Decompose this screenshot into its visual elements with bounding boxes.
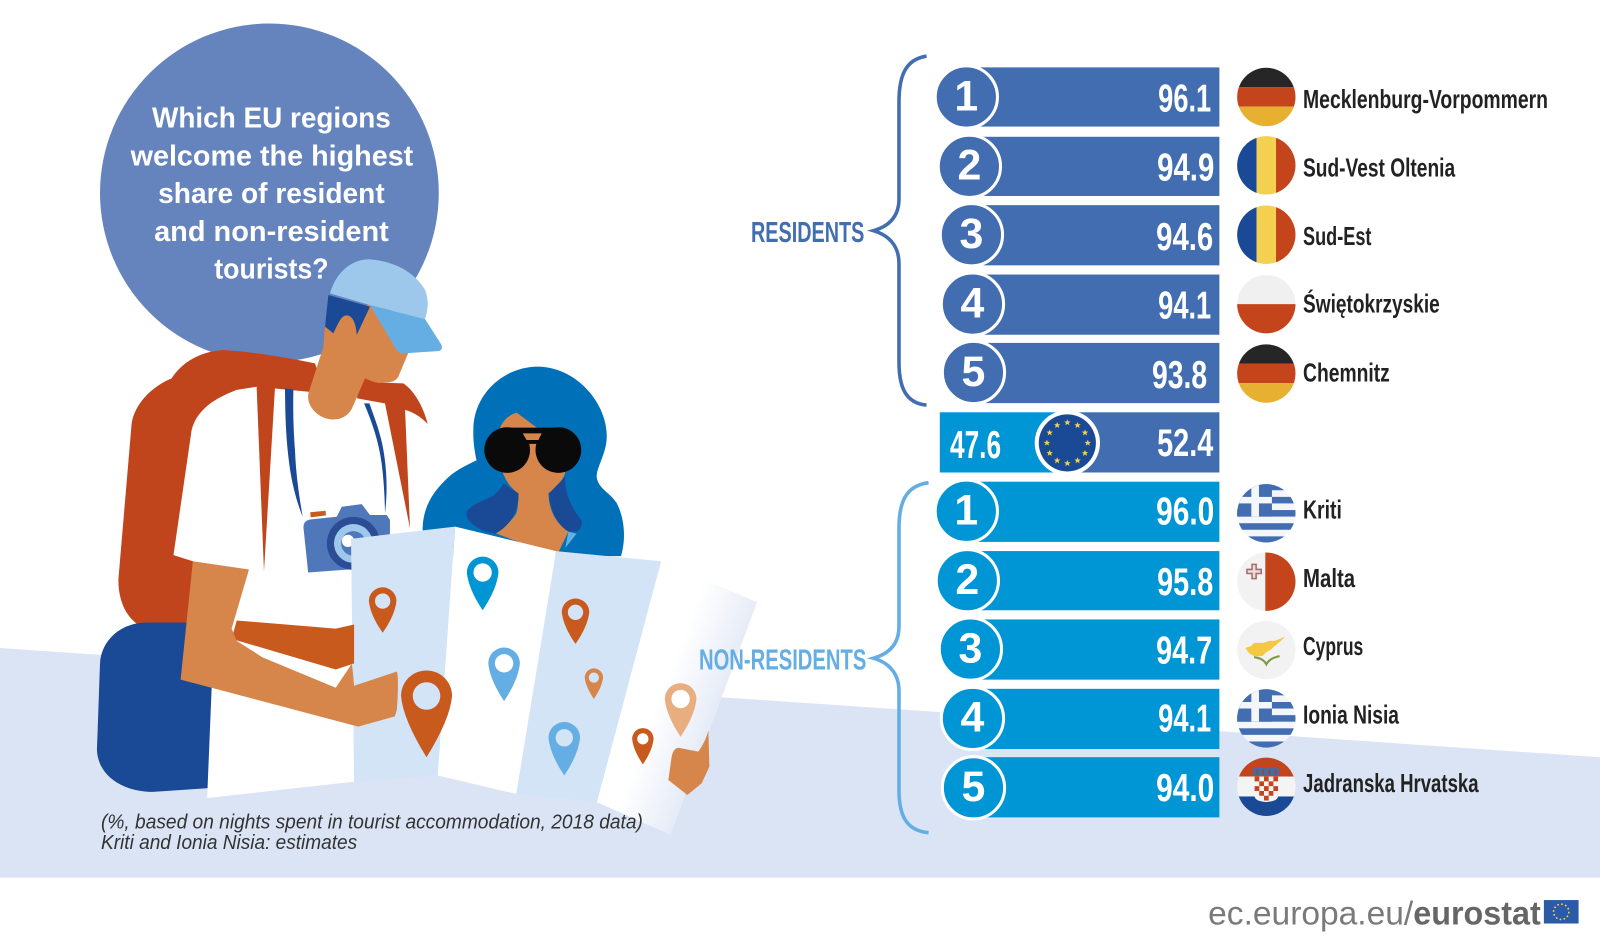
bar: rank 5 xyxy=(942,341,1219,404)
bar: rank 1: 96.0 xyxy=(1156,491,1214,534)
flag: Romania (Sud-Vest Oltenia) xyxy=(1237,136,1296,195)
bar: rank 2: 2 xyxy=(957,142,981,190)
bar: rank 5 xyxy=(942,757,1219,819)
illustration: tourists with map xyxy=(97,259,757,835)
region names: Ionia Nisia xyxy=(1303,702,1400,730)
region names: Jadranska Hrvatska xyxy=(1303,770,1479,798)
bar: rank 5: 94.0 xyxy=(1156,767,1214,810)
map pins xyxy=(369,557,696,776)
flag: Greece (Ionia Nisia) xyxy=(1237,689,1296,748)
background band xyxy=(0,648,1600,878)
icon: EU flag logo xyxy=(1544,900,1579,924)
footnote xyxy=(101,812,643,854)
bar: rank 1: 1 xyxy=(954,72,978,120)
footnote: Kriti and Ionia Nisia: estimates xyxy=(101,832,357,854)
far arm xyxy=(232,620,354,669)
non-residents bars xyxy=(935,480,1219,819)
bar: rank 4 xyxy=(941,273,1219,335)
non-residents brace and label xyxy=(699,483,929,833)
region names: Sud-Vest Oltenia xyxy=(1303,155,1456,183)
region names xyxy=(1303,86,1548,798)
flag: Croatia (Jadranska Hrvatska) xyxy=(1237,757,1296,816)
title bubble: Which EU regions xyxy=(152,103,391,135)
region names: Świętokrzyskie xyxy=(1303,288,1440,318)
bar: rank 5: 5 xyxy=(962,763,985,811)
woman collar xyxy=(565,532,577,548)
bar: rank 1 xyxy=(935,480,1219,542)
sunglasses xyxy=(484,427,581,473)
region names: Kriti xyxy=(1303,496,1342,524)
bar: rank 3 xyxy=(939,618,1219,680)
pack straps xyxy=(257,376,428,571)
region names: Malta xyxy=(1303,565,1356,593)
eurostat footer logo: ec.europa.eu/ xyxy=(1208,896,1414,933)
woman hair shadow xyxy=(466,477,582,533)
camera xyxy=(303,504,390,572)
residents brace and label: RESIDENTS xyxy=(751,217,864,249)
flag: Poland (Swietokrzyskie) xyxy=(1237,275,1296,334)
cap xyxy=(330,259,428,319)
eurostat footer logo xyxy=(1208,896,1579,933)
cap visor xyxy=(370,305,442,353)
shirt xyxy=(173,387,410,798)
region names: Cyprus xyxy=(1303,633,1363,661)
bar: rank 2: 94.9 xyxy=(1157,147,1214,190)
EU average bar: 47.6 xyxy=(950,424,1001,467)
bar: rank 3: 3 xyxy=(958,624,982,672)
bar: rank 4: 94.1 xyxy=(1158,284,1211,327)
backpack xyxy=(118,350,327,625)
EU average bar xyxy=(940,410,1219,476)
woman hair xyxy=(422,367,624,556)
bar: rank 4 xyxy=(941,687,1219,750)
flag: Germany (Mecklenburg-Vorpommern) xyxy=(1237,67,1296,127)
bar: rank 5: 93.8 xyxy=(1152,354,1207,397)
eurostat footer logo: eurostat xyxy=(1413,896,1541,933)
residents bars xyxy=(935,66,1219,404)
region names: Chemnitz xyxy=(1303,360,1390,388)
bar: rank 2: 2 xyxy=(955,556,979,604)
bar: rank 4: 94.1 xyxy=(1158,698,1211,741)
bar: rank 1: 1 xyxy=(954,487,978,535)
bar: rank 1: 96.1 xyxy=(1158,77,1211,120)
woman face and neck xyxy=(496,413,568,556)
right hand xyxy=(668,731,709,795)
footnote: (%, based on nights spent in tourist accommodation, 2018 data) xyxy=(101,812,643,834)
bar: rank 3: 3 xyxy=(960,210,983,258)
title bubble xyxy=(100,24,439,362)
bar: rank 3: 94.6 xyxy=(1156,216,1213,259)
bar: rank 1 xyxy=(935,66,1219,128)
map xyxy=(351,527,757,835)
non-residents brace and label: NON-RESIDENTS xyxy=(699,644,866,676)
bar: rank 3 xyxy=(940,204,1219,266)
head and neck xyxy=(308,304,408,419)
bar: rank 4: 4 xyxy=(961,694,985,742)
bar: rank 2 xyxy=(938,135,1219,198)
flag: Romania (Sud-Est) xyxy=(1237,205,1296,264)
residents brace and label xyxy=(751,56,927,405)
bar: rank 4: 4 xyxy=(961,279,985,327)
title bubble: and non-resident xyxy=(154,216,389,248)
region names: Sud-Est xyxy=(1303,223,1372,251)
shorts xyxy=(97,622,214,792)
icon: EU flag xyxy=(1035,410,1100,476)
flag: Cyprus xyxy=(1237,620,1296,680)
bar: rank 2: 95.8 xyxy=(1157,561,1213,604)
flag: Germany (Chemnitz) xyxy=(1237,344,1296,403)
bar: rank 3: 94.7 xyxy=(1156,629,1212,672)
bar: rank 2 xyxy=(936,550,1219,612)
title bubble: tourists? xyxy=(214,254,329,286)
hair xyxy=(325,295,370,335)
flag: Malta xyxy=(1237,552,1296,611)
EU average bar: 52.4 xyxy=(1157,422,1214,465)
title bubble: welcome the highest xyxy=(130,140,414,172)
camera strap xyxy=(285,388,387,517)
flag: Greece (Kriti) xyxy=(1237,484,1296,543)
near arm and hand xyxy=(181,561,398,727)
title bubble: share of resident xyxy=(158,178,385,210)
bar: rank 5: 5 xyxy=(962,348,985,396)
